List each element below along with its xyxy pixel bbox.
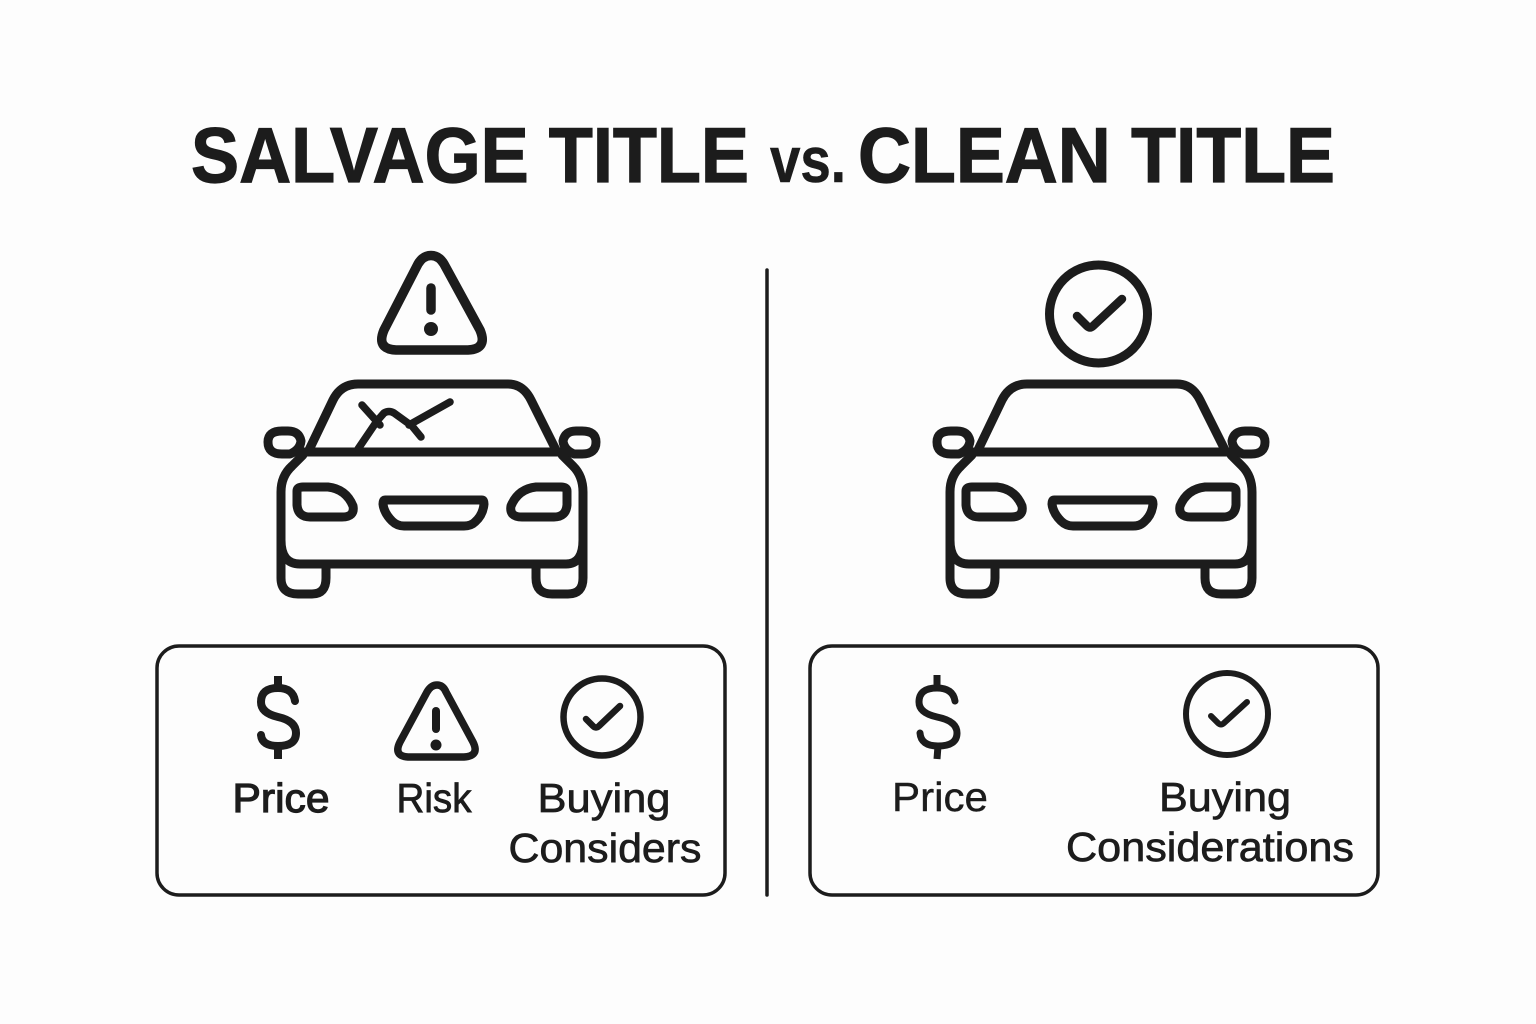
- title: CLEAN TITLE: [858, 111, 1335, 199]
- icon: warning triangle: [382, 256, 482, 350]
- icon: dollar: [919, 675, 957, 759]
- panel: salvage title details: [157, 646, 725, 895]
- panel: clean title details: [810, 646, 1378, 895]
- title: [191, 111, 1335, 199]
- label: buying considers: Considers: [508, 825, 702, 871]
- label: buying considerations: Buying: [1159, 774, 1291, 820]
- label: buying considers: Buying: [538, 775, 670, 821]
- label: price: Price: [892, 774, 988, 820]
- divider: [765, 270, 769, 895]
- label: price: Price: [232, 775, 330, 821]
- title: SALVAGE TITLE: [191, 111, 749, 199]
- icon: check circle: [1050, 265, 1148, 363]
- icon: check circle small: [1186, 673, 1268, 755]
- icon: clean car: [937, 384, 1265, 594]
- icon: check circle small: [564, 678, 640, 756]
- label: risk: Risk: [396, 775, 472, 821]
- label: buying considers: [508, 775, 702, 871]
- label: buying considerations: Considerations: [1066, 824, 1354, 870]
- title: vs.: [770, 124, 846, 196]
- icon: risk triangle: [398, 685, 475, 757]
- icon: dollar: [261, 676, 296, 759]
- icon: damaged car: [268, 384, 596, 594]
- label: buying considerations: [1066, 774, 1354, 870]
